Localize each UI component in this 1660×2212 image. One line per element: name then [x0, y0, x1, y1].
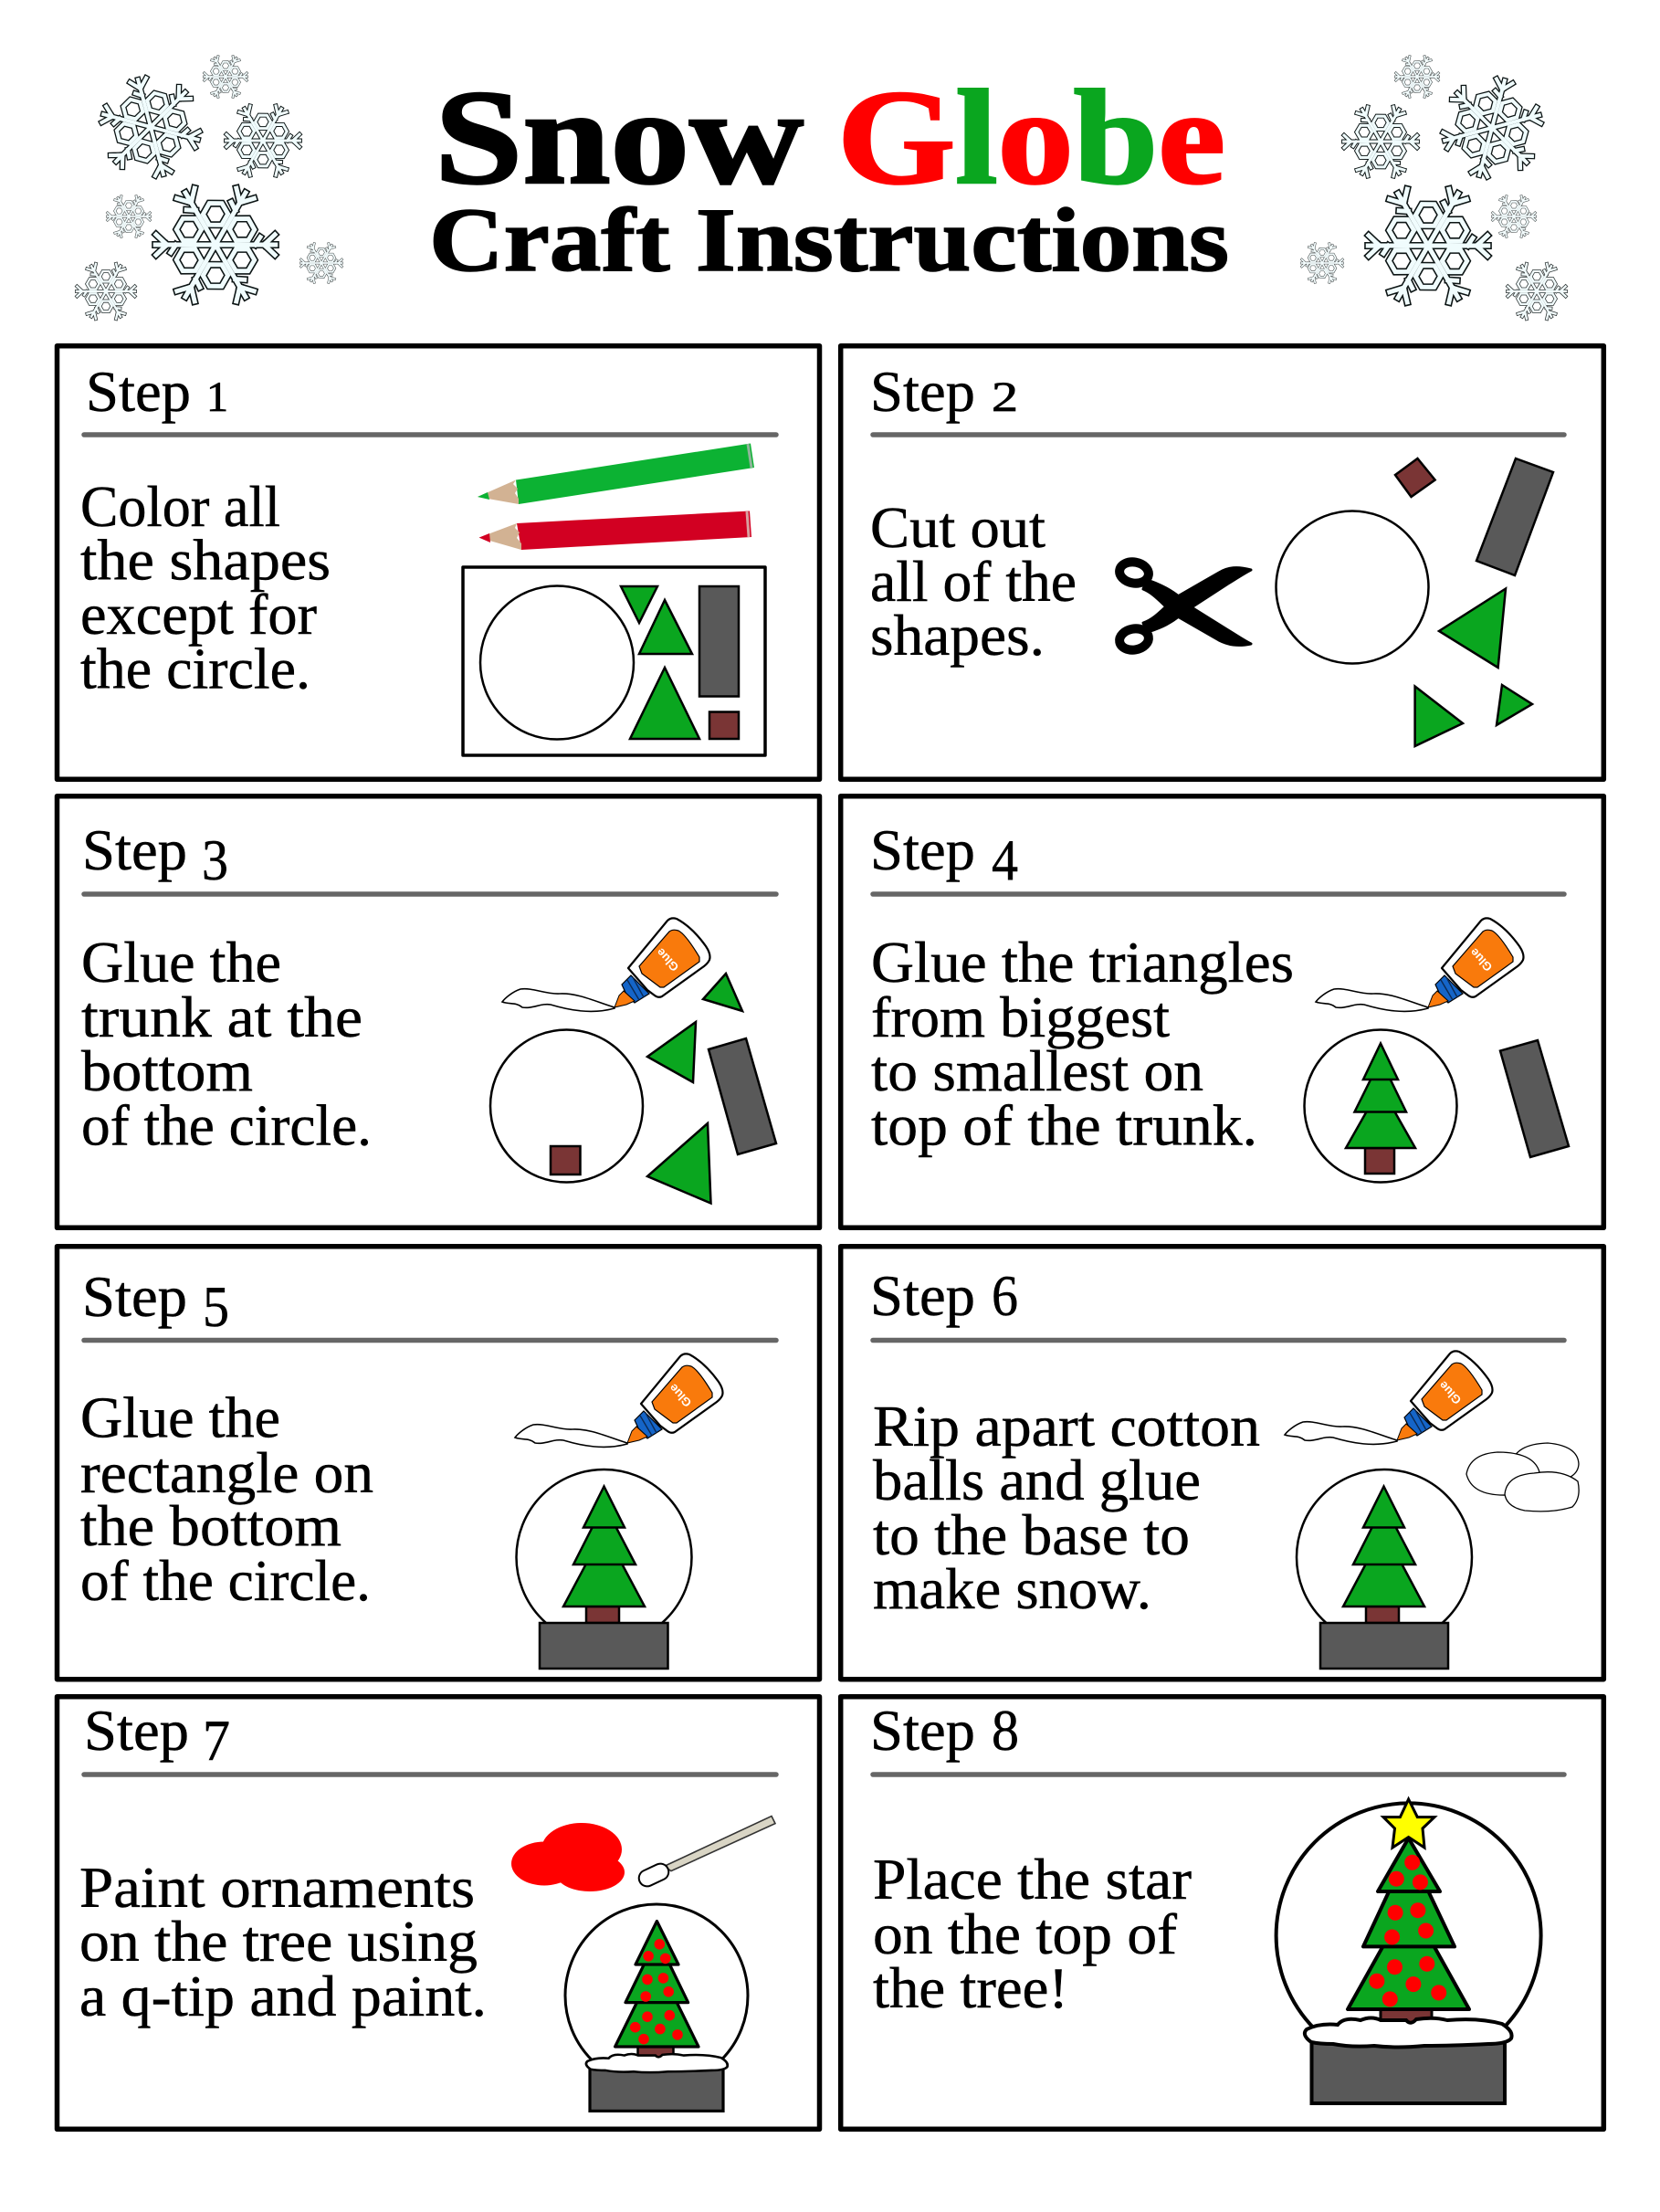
icon: cotton balls [1466, 1443, 1579, 1512]
panel: step 6 [841, 1247, 1603, 1680]
text: step 2 instructions [870, 496, 1077, 668]
panel: step 4 [841, 796, 1603, 1227]
panel: step 3 [57, 796, 820, 1227]
text: step 5 instructions: the bottom [80, 1494, 341, 1558]
icon: red paint blob [511, 1823, 625, 1891]
text: step 1 instructions: Color all [80, 475, 280, 539]
icon: green pencil [478, 444, 754, 504]
heading: step 8 [870, 1698, 1019, 1763]
text: step 8 instructions: the tree! [873, 1956, 1068, 2020]
text: step 6 instructions: Rip apart cotton [873, 1395, 1260, 1459]
icon: glue bottle with trail [1316, 918, 1523, 1011]
text: step 6 instructions [873, 1395, 1260, 1621]
text: step 6 instructions: make snow. [873, 1557, 1151, 1621]
heading: step 4 [870, 817, 1018, 892]
shape: gray rectangle [709, 1038, 776, 1154]
shape: small triangle [1497, 685, 1532, 725]
heading: step 3: Step [82, 817, 187, 882]
title: Snow Globe [435, 63, 1225, 213]
heading: step 6: Step [870, 1263, 975, 1328]
snowflakes: right cluster [1293, 47, 1579, 332]
heading: step 2: 2 [992, 374, 1018, 421]
text: step 5 instructions: Glue the [80, 1386, 280, 1450]
snow globe with ornaments [565, 1904, 748, 2111]
shape: gray rectangle [1476, 458, 1553, 575]
heading: step 5 [82, 1264, 229, 1339]
heading: step 5: Step [82, 1264, 187, 1329]
text: step 2 instructions: Cut out [870, 496, 1046, 560]
text: step 7 instructions: Paint ornaments [79, 1856, 475, 1920]
icon: yellow star [1383, 1799, 1434, 1848]
heading: step 4: 4 [992, 827, 1018, 892]
worksheet of shapes [463, 567, 765, 755]
icon: glue bottle with trail: Glue [1467, 945, 1495, 974]
icon: glue bottle with trail [1285, 1351, 1492, 1444]
shape: circle [1277, 511, 1428, 663]
text: step 4 instructions: top of the trunk. [871, 1094, 1257, 1158]
icon: q-tip [636, 1816, 775, 1889]
heading: step 6: 6 [992, 1263, 1018, 1328]
shape: medium triangle [647, 1022, 696, 1082]
shape: medium triangle [1415, 687, 1463, 746]
heading: step 2: Step [870, 359, 975, 424]
text: step 4 instructions [871, 931, 1294, 1158]
text: step 1 instructions: the shapes [80, 529, 331, 593]
heading: step 1: Step [86, 359, 191, 424]
panel: step 8 [841, 1697, 1603, 2129]
icon: glue bottle with trail [502, 918, 710, 1011]
text: step 7 instructions: a q-tip and paint. [79, 1964, 487, 2028]
circle with trunk [490, 1030, 643, 1182]
heading: step 8: Step [870, 1698, 975, 1763]
text: step 3 instructions: bottom [81, 1039, 253, 1103]
text: step 5 instructions [80, 1386, 373, 1613]
text: step 4 instructions: Glue the triangles [871, 931, 1294, 995]
text: step 1 instructions: the circle. [80, 637, 310, 701]
text: step 3 instructions [81, 931, 372, 1158]
text: step 3 instructions: Glue the [81, 931, 281, 995]
text: step 5 instructions: of the circle. [80, 1549, 371, 1613]
shape: brown square [1395, 458, 1435, 497]
finished snow globe with star [1277, 1799, 1541, 2103]
panel: step 7 [57, 1697, 820, 2129]
text: step 2 instructions: shapes. [870, 604, 1045, 668]
text: step 8 instructions: on the top of [873, 1902, 1177, 1966]
text: step 8 instructions: Place the star [873, 1848, 1192, 1912]
shape: large triangle [647, 1123, 710, 1204]
text: step 7 instructions [79, 1856, 487, 2028]
heading: step 8: 8 [992, 1698, 1019, 1763]
snow globe with tree and base [1297, 1469, 1472, 1669]
panel: step 1 [57, 346, 820, 779]
heading: step 4: Step [870, 817, 975, 882]
text: step 2 instructions: all of the [870, 550, 1077, 614]
icon: glue bottle with trail [515, 1354, 723, 1447]
icon: red pencil [479, 511, 751, 550]
shape: gray rectangle [1500, 1040, 1569, 1157]
shape: large triangle [1439, 588, 1506, 668]
icon: scissors [1118, 560, 1251, 652]
panel: step 5 [57, 1247, 820, 1680]
text: step 3 instructions: of the circle. [81, 1094, 372, 1158]
icon: glue bottle with trail: Glue [654, 945, 681, 974]
text: step 4 instructions: to smallest on [871, 1039, 1203, 1103]
snow globe with tree and base [517, 1469, 692, 1669]
circle with tree [1304, 1030, 1457, 1182]
panel: step 2 [841, 346, 1603, 779]
heading: step 7: Step [84, 1698, 189, 1763]
title: Snow Globe: Snow [435, 63, 804, 213]
text: step 1 instructions [80, 475, 331, 701]
title: Snow Globe: Globe [837, 63, 1225, 213]
text: step 4 instructions: from biggest [871, 985, 1171, 1049]
text: step 5 instructions: rectangle on [80, 1441, 373, 1505]
subtitle: Craft Instructions: Craft Instructions [429, 189, 1229, 290]
text: step 6 instructions: to the base to [873, 1503, 1190, 1567]
heading: step 7 [84, 1698, 230, 1773]
heading: step 3 [82, 817, 228, 892]
heading: step 7: 7 [203, 1708, 230, 1773]
icon: glue bottle with trail: Glue [667, 1381, 694, 1410]
text: step 8 instructions [873, 1848, 1192, 2020]
text: step 3 instructions: trunk at the [81, 985, 362, 1049]
icon: glue bottle with trail: Glue [1436, 1378, 1464, 1407]
heading: step 1: 1 [206, 374, 228, 421]
snowflakes: left cluster [64, 47, 351, 332]
text: step 1 instructions: except for [80, 583, 317, 647]
shape: small triangle [703, 974, 742, 1011]
text: step 6 instructions: balls and glue [873, 1448, 1201, 1512]
heading: step 3: 3 [202, 827, 228, 892]
text: step 7 instructions: on the tree using [79, 1910, 478, 1974]
heading: step 5: 5 [203, 1274, 229, 1339]
